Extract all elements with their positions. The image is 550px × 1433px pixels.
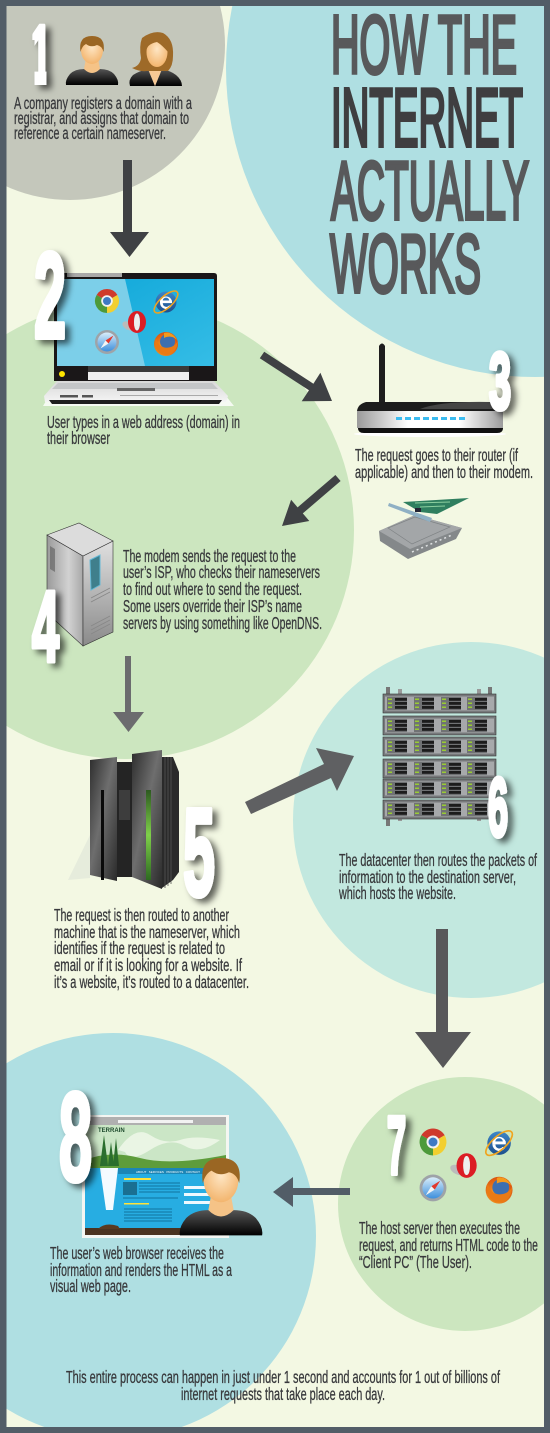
panel: step 3: [354, 336, 533, 559]
text: step 3: [355, 445, 533, 482]
panel: step 2: [34, 228, 240, 448]
text: step 2: User types in a web address (domain) in: [47, 412, 240, 432]
text: step 7: “Client PC” (The User).: [359, 1252, 472, 1272]
panel: step 6: 6: [488, 760, 508, 854]
text: step 6: [338, 850, 537, 903]
panel: step 3: 3: [489, 336, 511, 426]
text: step 5: it’s a website, it’s routed to a datacenter.: [54, 972, 249, 992]
text: step 8: visual web page.: [50, 1276, 131, 1296]
text: step 2: their browser: [47, 428, 110, 448]
closing note: internet requests that take place each day.: [181, 1384, 385, 1404]
text: step 4: user’s ISP, who checks their nameservers: [123, 562, 320, 582]
panel: step 5: 5: [183, 784, 215, 922]
background circle: title blue: [226, 0, 550, 377]
icon: server rack: [383, 687, 496, 826]
text: step 1: [14, 93, 192, 143]
icon: browser logos: [95, 288, 181, 356]
text: step 5: identifies if the request is related to: [54, 938, 225, 958]
text: step 8: The user’s web browser receives the: [50, 1243, 224, 1263]
arrow: step 2 to step 3: [260, 352, 332, 401]
text: step 1: reference a certain nameserver.: [14, 123, 166, 143]
icon: man: [66, 36, 118, 85]
icon: man: [180, 1158, 262, 1235]
icon: mainframe: [68, 750, 179, 889]
text: step 4: The modem sends the request to the: [123, 546, 296, 566]
arrow: step 4 to step 5: [113, 656, 144, 732]
text: step 7: [359, 1218, 538, 1272]
panel: step 6: [338, 687, 537, 903]
icon: website in browser window: TERRAIN: [98, 1128, 125, 1134]
panel: step 8: [50, 1068, 262, 1296]
panel: step 7: [359, 1100, 538, 1272]
panel: step 4: 4: [32, 571, 59, 683]
closing note: [66, 1367, 500, 1404]
text: step 4: Some users override their ISP’s name: [123, 596, 302, 616]
text: step 8: [50, 1243, 232, 1296]
text: step 4: to find out where to send the request.: [123, 579, 302, 599]
text: step 5: email or if it is looking for a website. If: [54, 955, 242, 975]
panel: step 5: [54, 750, 249, 992]
arrow: step 5 to step 6: [245, 748, 354, 814]
panel: step 7: 7: [387, 1100, 406, 1192]
arrow: step 3 to step 4: [282, 475, 341, 526]
text: step 5: The request is then routed to another: [54, 905, 229, 925]
title: [330, 0, 529, 310]
text: step 4: [123, 546, 322, 633]
panel: step 4: [32, 523, 322, 683]
background circle: steps 2 and 4 green: [0, 301, 354, 759]
icon: browser logos: [420, 1127, 516, 1204]
panel: step 8: 8: [59, 1068, 92, 1208]
text: step 2: [47, 412, 240, 448]
icon: woman: [129, 32, 182, 86]
background circle: step 8 blue: [0, 1033, 316, 1433]
arrow: step 1 to step 2: [110, 160, 149, 257]
text: step 5: machine that is the nameserver, which: [54, 922, 240, 942]
icon: router: [354, 344, 506, 437]
text: step 5: [54, 905, 249, 992]
arrow: step 6 to step 7: [415, 929, 471, 1068]
icon: website in browser window: ABOUT SERVICES PRODUCTS CONTACT: [136, 1170, 200, 1174]
icon: modem and network card: [379, 498, 469, 559]
panel: step 2: 2: [34, 228, 66, 364]
panel: step 1: 1: [31, 10, 51, 100]
icon: website in browser window: [82, 1115, 229, 1238]
background circle: step 1 grey: [0, 0, 225, 200]
icon: laptop: [43, 273, 234, 406]
background circle: step 7 green: [338, 1077, 550, 1331]
icon: tower server: [47, 523, 113, 646]
text: step 1: registrar, and assigns that domain to: [14, 108, 189, 128]
arrow: step 7 to step 8: [273, 1177, 350, 1207]
text: step 4: servers by using something like OpenDNS.: [123, 613, 322, 633]
text: step 6: which hosts the website.: [338, 883, 456, 903]
panel: step 1: [14, 24, 192, 140]
text: step 8: information and renders the HTML as a: [50, 1260, 232, 1280]
text: step 1: A company registers a domain with a: [14, 93, 192, 113]
background circle: step 6 teal: [293, 642, 550, 998]
